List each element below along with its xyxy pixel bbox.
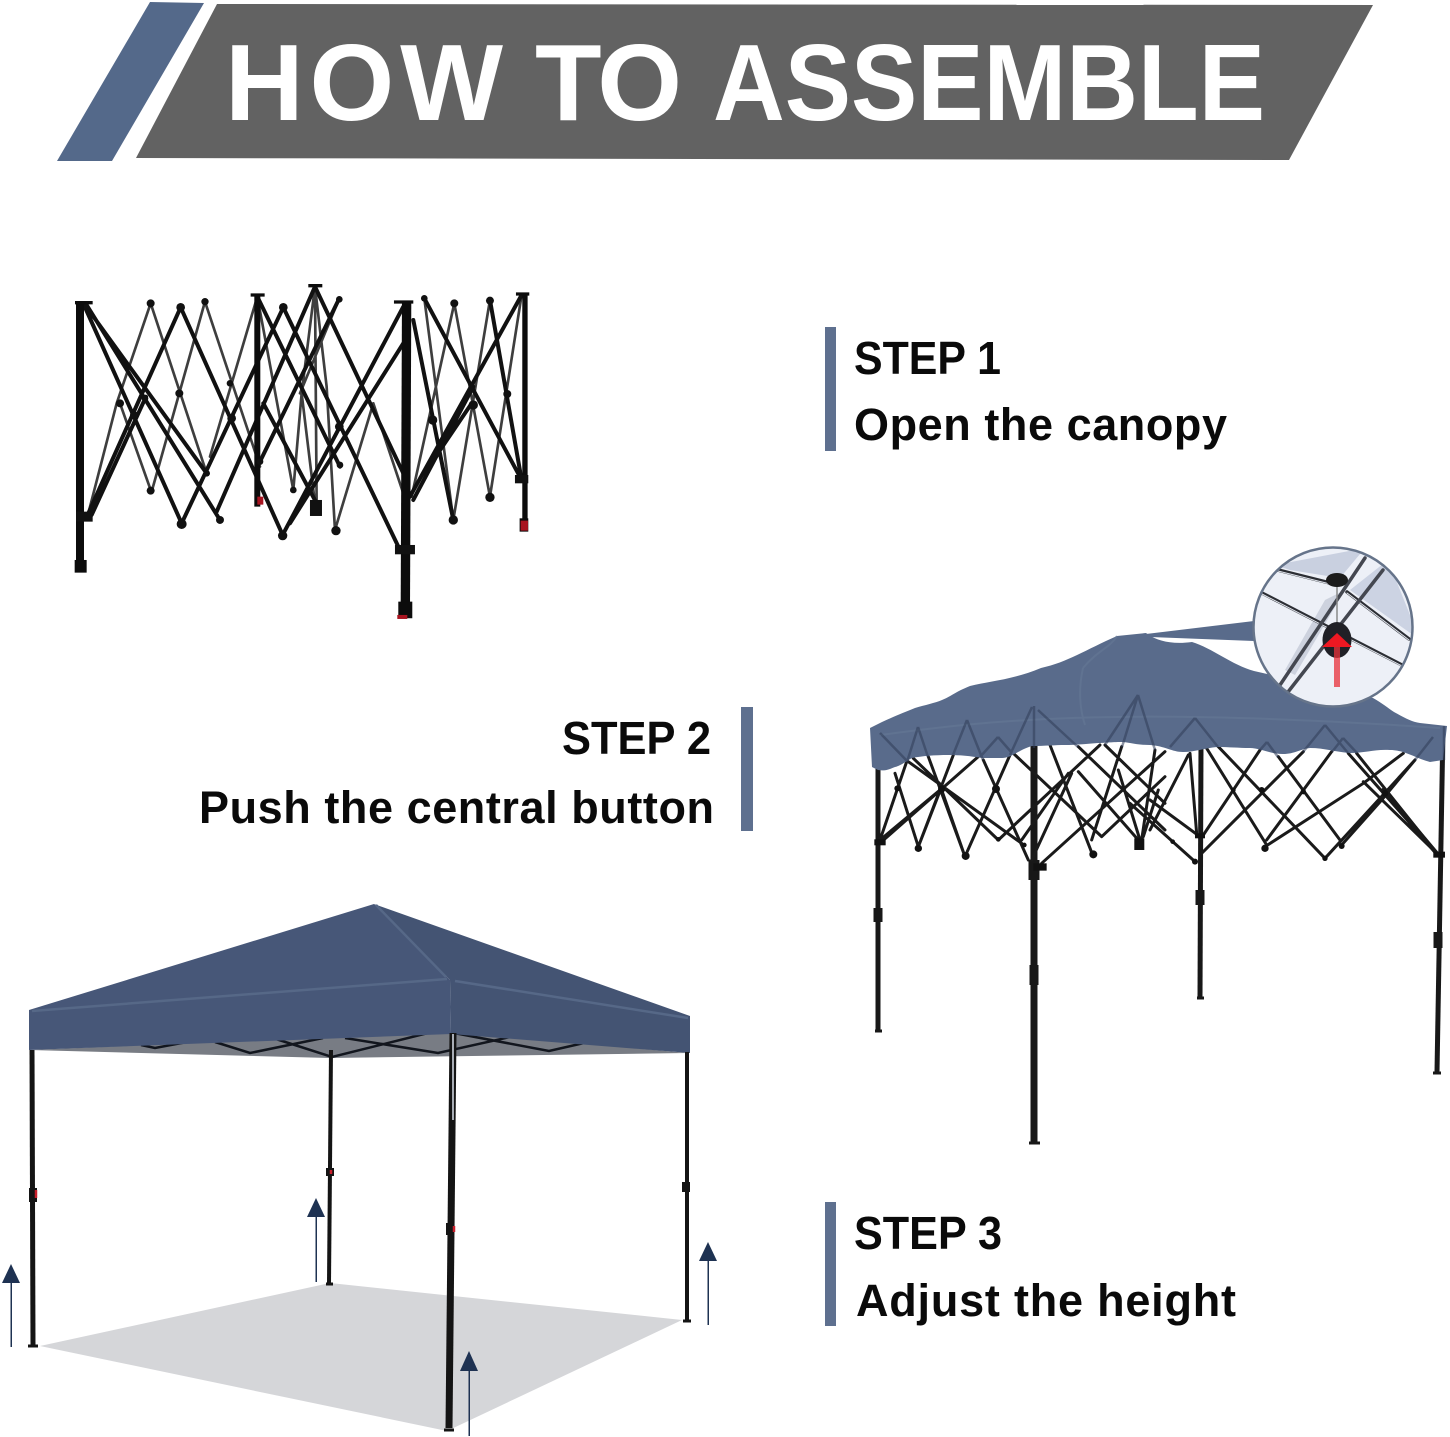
canopy ridge highlights xyxy=(32,905,688,1018)
step 2 heading: STEP 2 xyxy=(562,712,711,764)
step 2 frame seen through canopy xyxy=(880,695,1444,762)
underside scissor frame xyxy=(141,1033,584,1057)
title banner xyxy=(57,2,1373,161)
step 1 frame illustration xyxy=(75,286,529,619)
arrow: right leg up xyxy=(699,1242,717,1325)
step 1 heading: STEP 1 xyxy=(854,332,1001,384)
title: ASSEMBLE xyxy=(713,22,1265,144)
title: HOW xyxy=(225,22,503,144)
canopy right face xyxy=(374,904,690,1053)
step 2 accent bar xyxy=(741,707,753,831)
step 2 canopy fabric xyxy=(870,633,1447,770)
step 2 instruction: Push the central button xyxy=(199,782,714,833)
arrow: left leg up xyxy=(2,1264,20,1347)
canopy left face xyxy=(29,904,451,1050)
step 3 instruction: Adjust the height xyxy=(856,1275,1236,1326)
step 2 label xyxy=(199,707,753,833)
step 2 legs xyxy=(875,726,1443,1143)
step 2 right scissor frame xyxy=(1130,747,1445,865)
arrow: back leg up xyxy=(307,1198,325,1282)
step 3 finished canopy illustration xyxy=(2,904,717,1436)
title: TO xyxy=(535,22,682,144)
title xyxy=(225,22,1265,144)
step 2 left scissor frame xyxy=(874,745,1165,871)
callout magnifier: central button xyxy=(1254,548,1420,706)
legs xyxy=(28,1033,691,1430)
step 1 instruction: Open the canopy xyxy=(854,399,1227,450)
step 3 label xyxy=(825,1202,1236,1326)
step 3 heading: STEP 3 xyxy=(854,1207,1002,1259)
callout wedge xyxy=(1146,621,1254,641)
arrow: front leg up xyxy=(460,1351,478,1436)
step 2 canopy illustration xyxy=(870,548,1447,1143)
step 2 canopy highlight folds xyxy=(880,636,1440,735)
ground shadow xyxy=(40,1283,682,1431)
leg lock buttons xyxy=(36,1170,454,1232)
step 1 label xyxy=(825,327,1227,451)
step 1 accent bar xyxy=(825,327,836,451)
canopy underside xyxy=(30,1032,688,1058)
step 3 accent bar xyxy=(825,1202,836,1326)
